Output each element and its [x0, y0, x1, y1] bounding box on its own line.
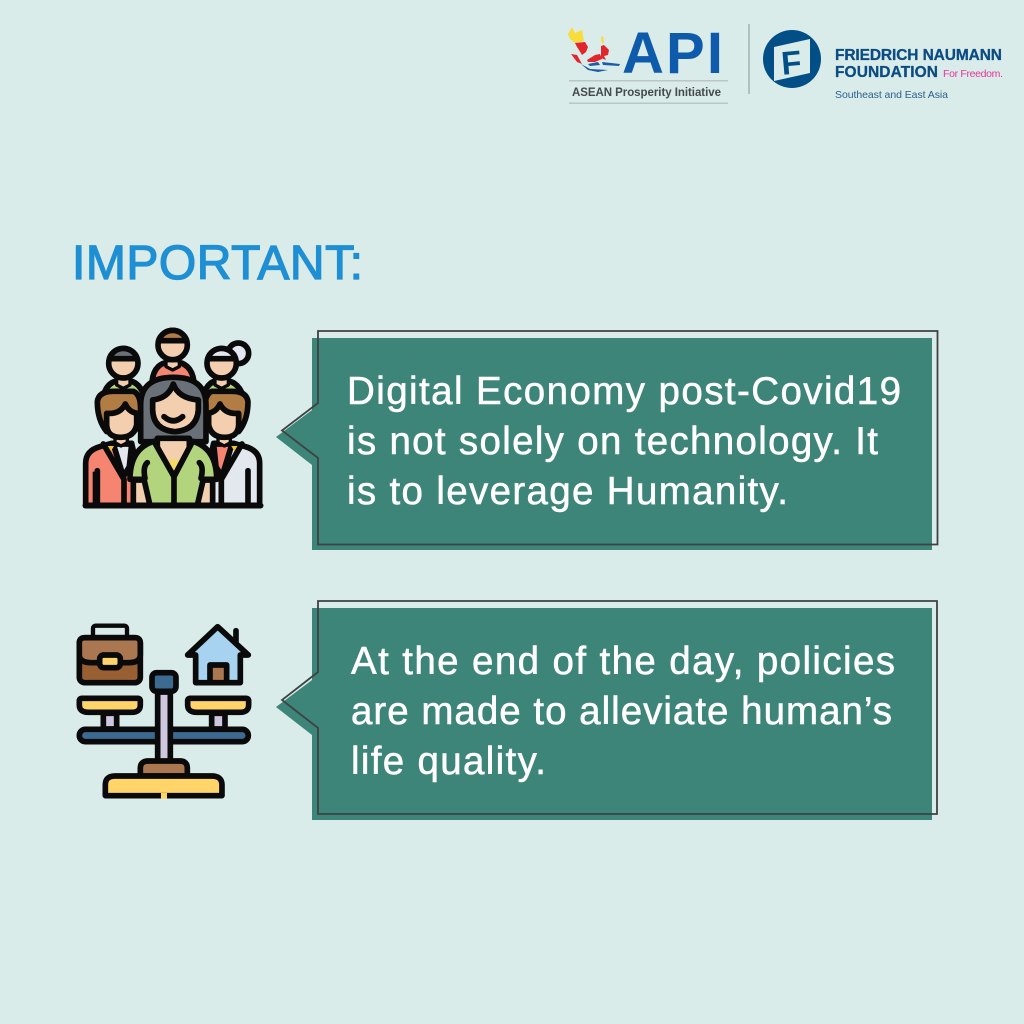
logo: ASEAN Prosperity Initiative [568, 21, 728, 104]
post [158, 692, 170, 762]
left man [86, 391, 141, 505]
briefcase [79, 626, 140, 683]
callout text: life quality. [351, 740, 546, 783]
icon: work-life balance scale [79, 626, 249, 799]
callout fill [276, 608, 932, 820]
logo: Friedrich Naumann Foundation: FOUNDATION [835, 64, 938, 81]
callout outline [282, 331, 938, 544]
post cap [152, 673, 176, 691]
callout outline [282, 601, 937, 814]
text: region: Southeast and East Asia [835, 89, 948, 101]
heading: IMPORTANT: [72, 237, 363, 290]
callout: digital economy [276, 331, 938, 550]
logo: Friedrich Naumann Foundation [763, 30, 1003, 101]
text: For Freedom: For Freedom. [943, 68, 1003, 80]
right pan [188, 698, 249, 712]
right man [205, 391, 260, 505]
base [140, 761, 187, 776]
callout: policies [276, 601, 937, 820]
callout fill [276, 338, 932, 550]
callout text [351, 640, 895, 783]
callout text: Digital Economy post-Covid19 [347, 370, 901, 413]
callout text: is not solely on technology. It [347, 420, 878, 463]
house [188, 627, 248, 683]
text: API: API [622, 21, 723, 86]
back-left person [103, 348, 144, 397]
back-center person [152, 330, 194, 382]
beam [79, 729, 248, 742]
icon: group of people [85, 330, 261, 506]
left pan [79, 698, 140, 712]
pan stems [103, 713, 225, 729]
callout text: is to leverage Humanity. [347, 470, 788, 513]
icon: foundation F circle: F [780, 43, 803, 82]
icon: foundation F circle [763, 30, 821, 88]
callout text: At the end of the day, policies [351, 640, 895, 683]
text: foundation name: FRIEDRICH NAUMANN [835, 47, 1002, 64]
text: ASEAN Prosperity Initiative: ASEAN Prosperity Initiative [572, 87, 721, 99]
center woman [130, 377, 217, 505]
icon: ASEAN map [568, 27, 620, 72]
back-right person [203, 343, 249, 397]
callout text: are made to alleviate human’s [351, 690, 892, 733]
callout text [347, 370, 901, 513]
